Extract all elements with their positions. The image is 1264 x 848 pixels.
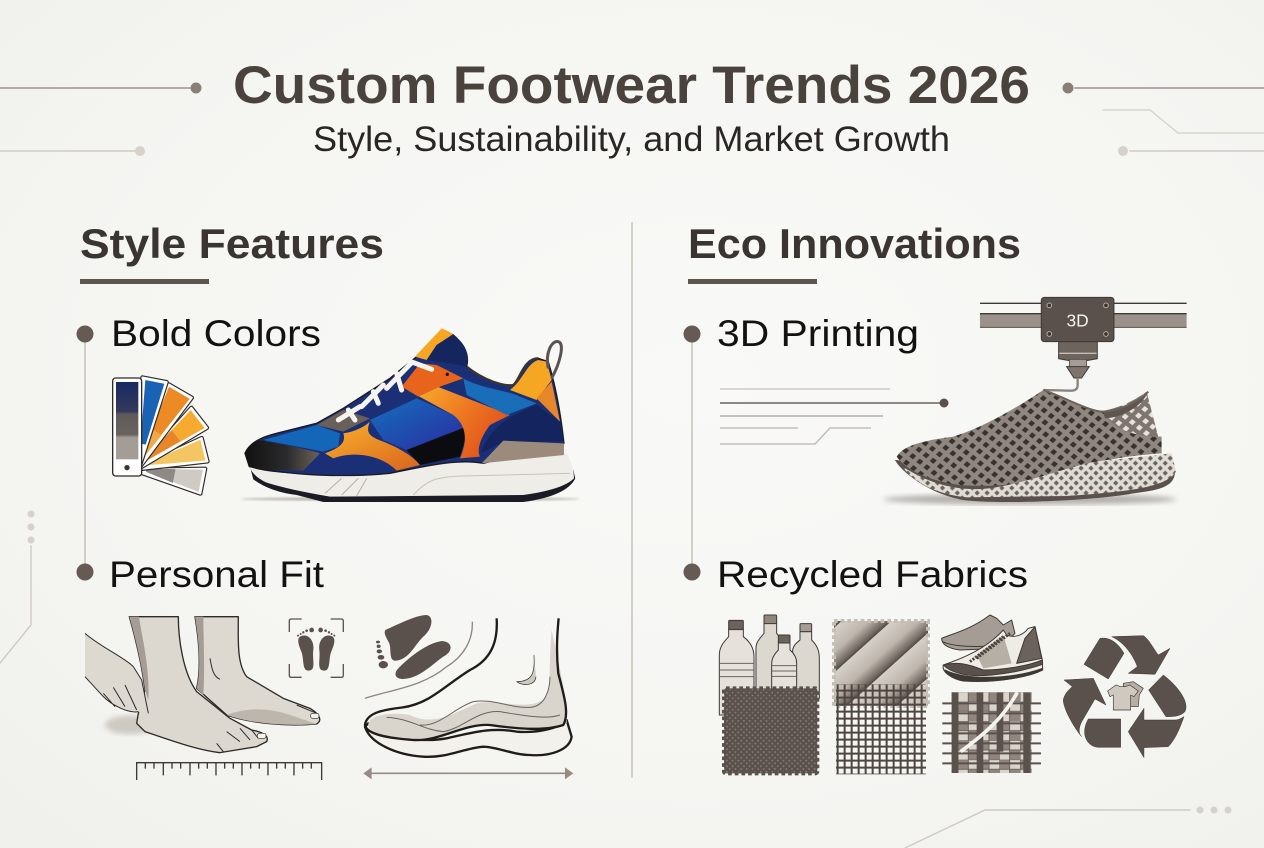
heading: style features: Style Features — [80, 220, 384, 267]
panel: style features — [76, 220, 580, 780]
label: bold colors: Bold Colors — [111, 313, 321, 354]
label: recycled fabrics: Recycled Fabrics — [717, 554, 1028, 595]
bullet: bold colors — [76, 326, 94, 342]
icon: foot scan — [289, 619, 343, 677]
bullet: recycled fabrics — [684, 564, 700, 580]
label: personal fit: Personal Fit — [109, 554, 325, 595]
timeline connector — [691, 334, 693, 572]
illustration: 3d printer head — [980, 297, 1187, 391]
ruler — [137, 763, 322, 780]
subtitle: Style, Sustainability, and Market Growth — [313, 120, 950, 159]
icon: recycling symbol with t-shirt — [1063, 636, 1186, 758]
illustration: 3d printer head: 3D — [1067, 310, 1089, 330]
fabric: knit — [724, 688, 817, 773]
fabric: twill — [834, 621, 928, 706]
icon: colour swatch fan — [113, 377, 207, 494]
illustration: custom insole — [363, 615, 573, 779]
label: 3d printing: 3D Printing — [717, 313, 919, 354]
heading underline — [688, 279, 817, 284]
heading: eco innovations: Eco Innovations — [688, 220, 1021, 267]
fabric swatches — [724, 621, 1041, 774]
fabric: grid mesh — [836, 684, 926, 774]
illustration: hand measuring feet — [85, 617, 320, 753]
illustration: recycled sneakers — [942, 615, 1043, 681]
fabric: woven — [942, 692, 1041, 773]
bullet: personal fit — [76, 564, 94, 580]
bullet: 3d printing — [684, 326, 700, 342]
title: Custom Footwear Trends 2026 — [233, 56, 1030, 115]
illustration: 3d printed shoe — [883, 390, 1177, 505]
icon: data lines — [720, 389, 948, 444]
illustration: recycled bottles — [719, 615, 819, 715]
timeline connector — [84, 334, 86, 572]
panel: eco innovations — [684, 220, 1187, 774]
illustration: colourful sneaker — [240, 328, 580, 502]
heading underline — [80, 279, 209, 284]
center divider — [631, 222, 633, 778]
